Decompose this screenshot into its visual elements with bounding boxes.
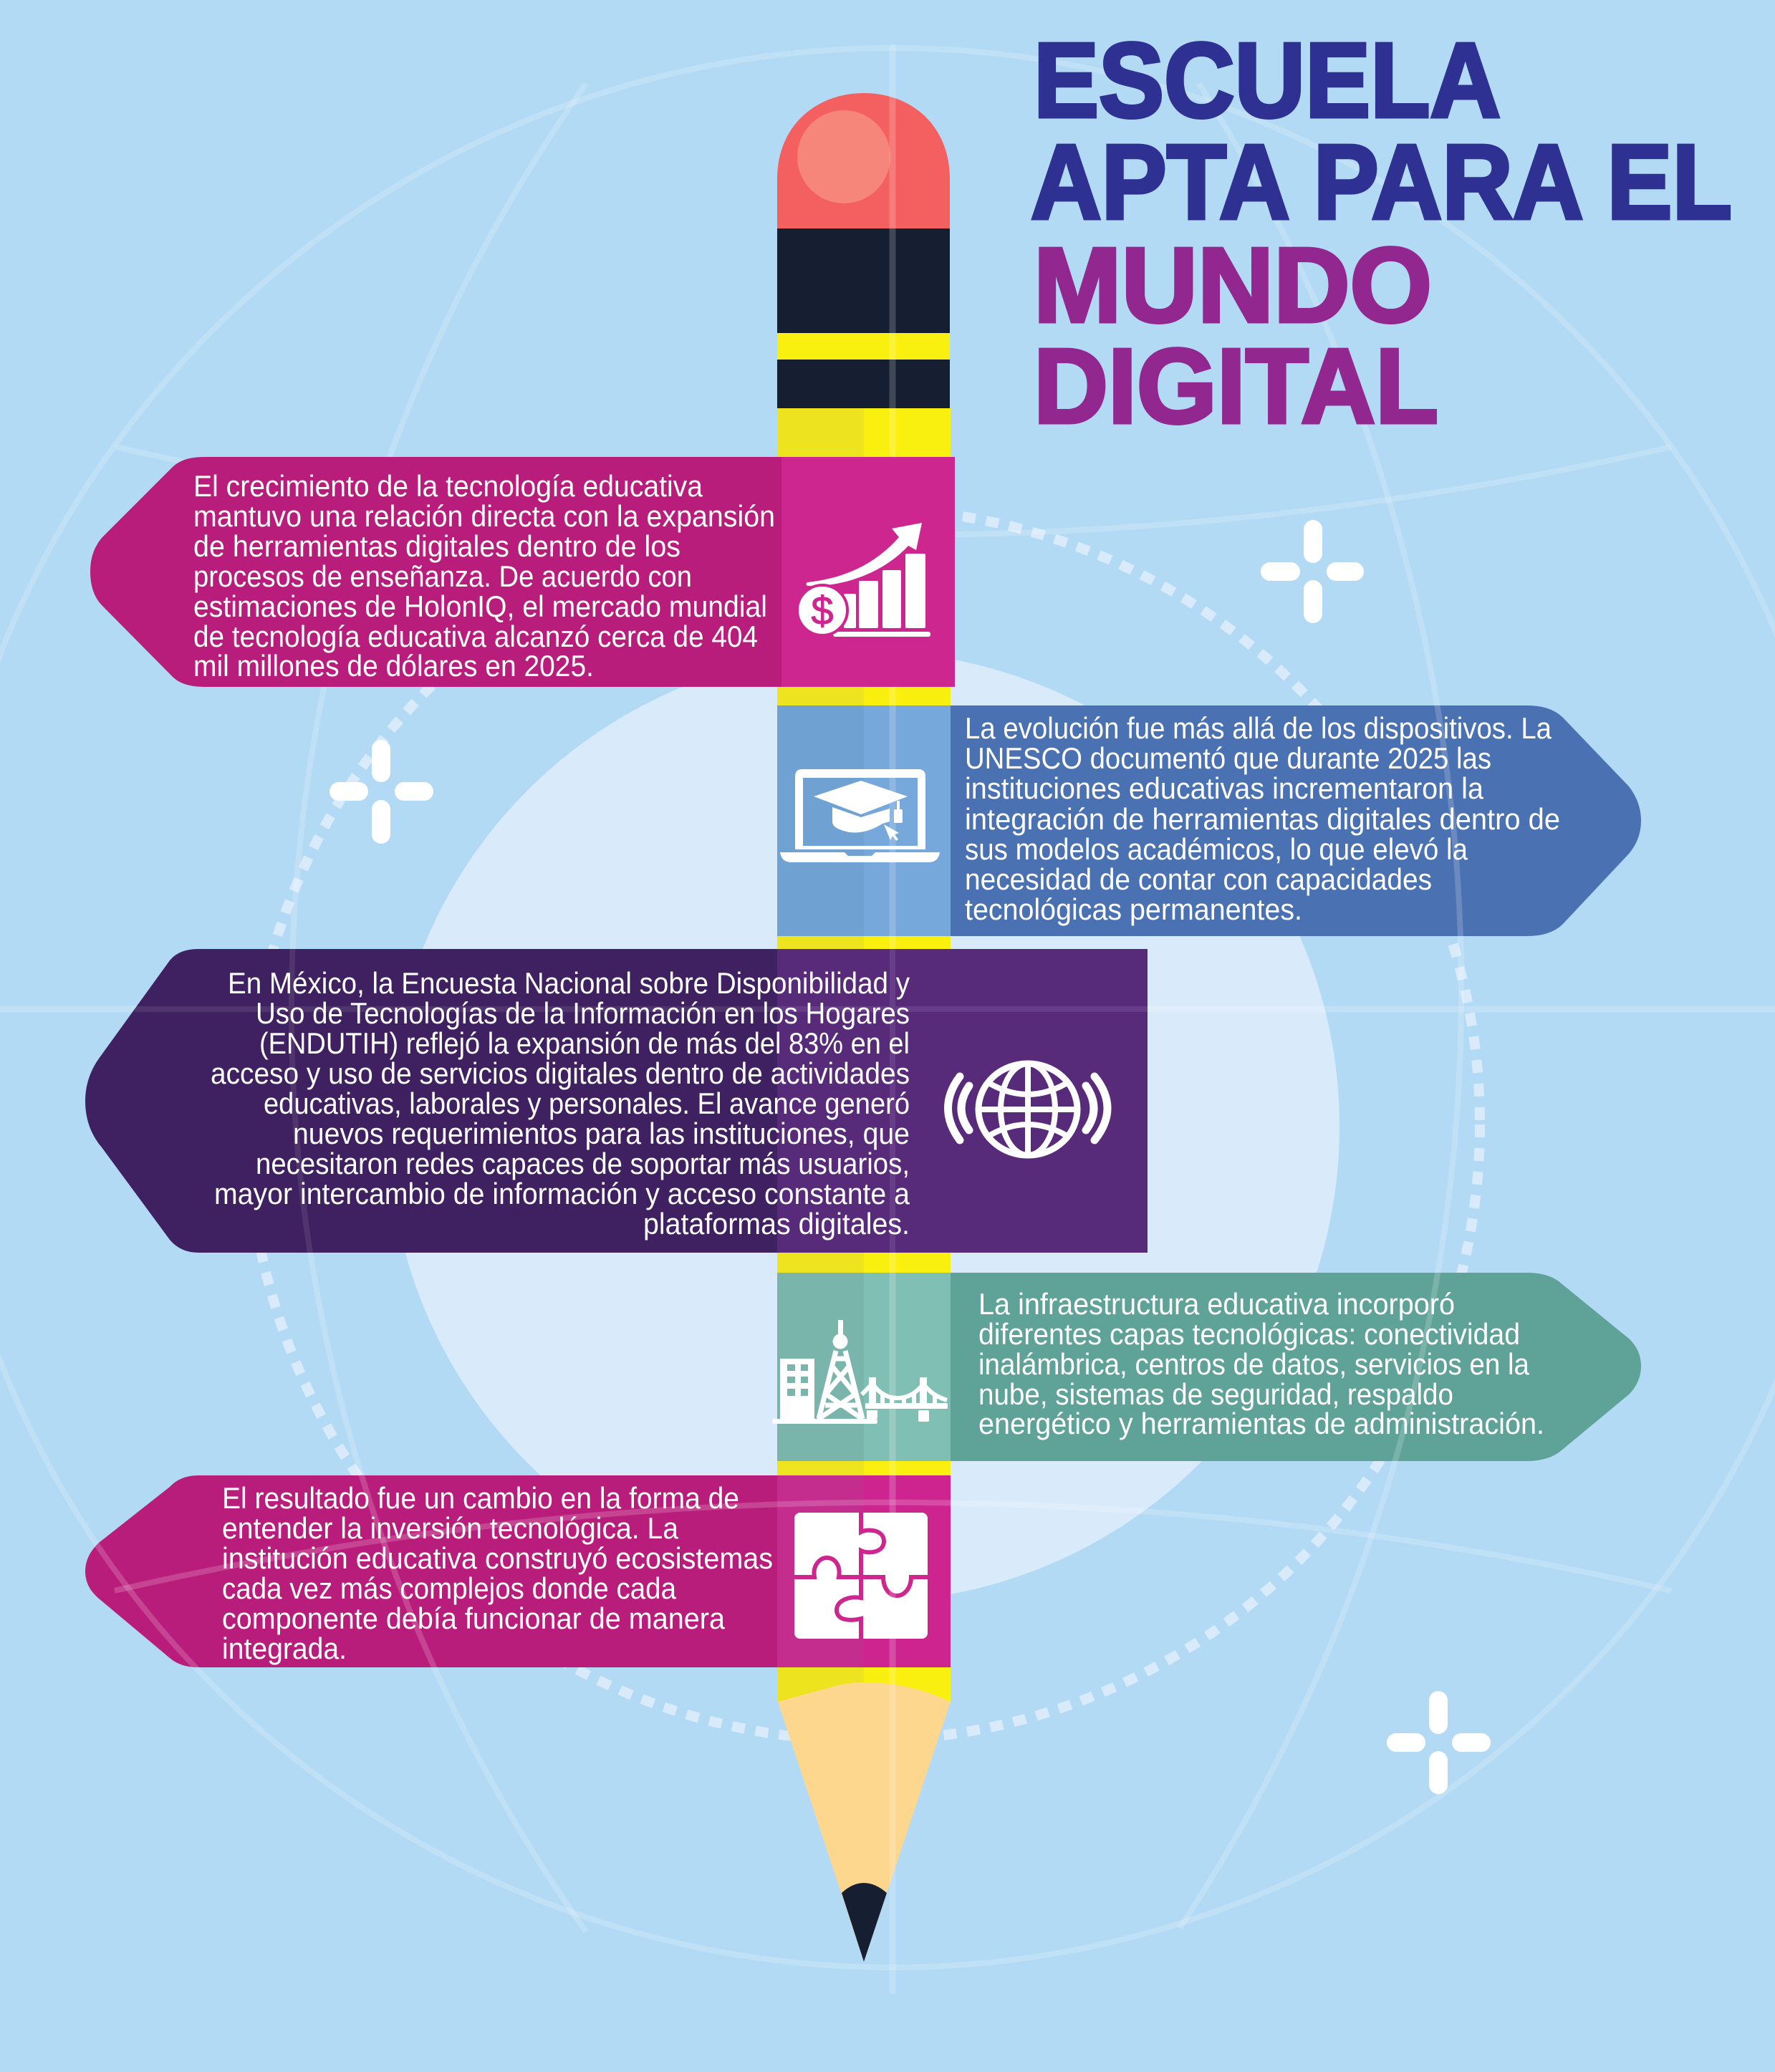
text block: sus modelos académicos, lo que elevó la (965, 832, 1468, 866)
text block: acceso y uso de servicios digitales dentro de actividades (211, 1056, 910, 1090)
sparkle bottom right (1387, 1691, 1491, 1794)
ferrule yellow band (777, 333, 950, 360)
text block: integrada. (222, 1632, 347, 1665)
coin dollar sign: $ (811, 588, 834, 633)
dotted ring (248, 509, 1480, 1740)
icon: growth chart with coin (797, 523, 930, 637)
text block: procesos de enseñanza. De acuerdo con (193, 559, 692, 593)
panel shape purple (85, 949, 1148, 1253)
text block: necesidad de contar con capacidades (965, 862, 1432, 896)
pale central circle (388, 651, 1339, 1602)
pencil wood tip (778, 1682, 951, 1962)
panel light section (777, 949, 1148, 1253)
icon: building tower and bridge (772, 1320, 948, 1424)
text block: En México, la Encuesta Nacional sobre Disponibilidad y (228, 966, 910, 1000)
text block: nube, sistemas de seguridad, respaldo (978, 1377, 1453, 1411)
text block: plataformas digitales. (643, 1207, 910, 1240)
panel shape magenta (90, 457, 781, 687)
pencil section left (777, 1273, 864, 1461)
title: APTA PARA EL (1031, 123, 1732, 241)
icon: globe with signal waves (948, 1064, 1107, 1155)
text block: El crecimiento de la tecnología educativa (193, 469, 703, 503)
panel: resultado (85, 1475, 951, 1667)
panel: mercado HolonIQ (90, 457, 955, 687)
text block: energético y herramientas de administración. (978, 1407, 1544, 1440)
eraser (777, 93, 950, 228)
text block: entender la inversión tecnológica. La (222, 1511, 679, 1545)
text block: educativas, laborales y personales. El avance generó (264, 1086, 910, 1120)
text block: mayor intercambio de información y acceso constante a (214, 1177, 910, 1210)
text block: de herramientas digitales dentro de los (193, 529, 680, 563)
text block: (ENDUTIH) reflejó la expansión de más del 83% en el (259, 1026, 910, 1060)
ferrule lower dark band (777, 360, 950, 408)
panel shape magenta (85, 1475, 951, 1667)
text block: inalámbrica, centros de datos, servicios en la (978, 1347, 1530, 1381)
text block (965, 711, 1560, 926)
title: DIGITAL (1034, 327, 1438, 445)
title (1031, 21, 1732, 445)
pencil lead (842, 1883, 887, 1962)
title: MUNDO (1034, 226, 1432, 344)
text block: diferentes capas tecnológicas: conectividad (978, 1317, 1520, 1351)
text block (978, 1287, 1544, 1440)
panel shape teal (951, 1273, 1641, 1461)
text block: necesitaron redes capaces de soportar más usuarios, (256, 1147, 910, 1180)
text block: estimaciones de HolonIQ, el mercado mundial (193, 589, 767, 623)
icon: laptop with graduation cap (780, 769, 940, 862)
pencil section left (777, 1475, 864, 1667)
text block: integración de herramientas digitales dentro de (965, 802, 1560, 836)
pencil section left (777, 705, 864, 936)
icon: puzzle (794, 1513, 928, 1639)
text block: El resultado fue un cambio en la forma de (222, 1481, 739, 1515)
text block (193, 469, 775, 683)
text block: instituciones educativas incrementaron la (965, 771, 1484, 805)
pencil section right (864, 705, 951, 936)
text block: La infraestructura educativa incorporó (978, 1287, 1455, 1321)
sparkle top right (1261, 520, 1364, 623)
text block (211, 966, 910, 1240)
text block: mil millones de dólares en 2025. (193, 649, 594, 683)
pencil (777, 93, 951, 1962)
title: ESCUELA (1034, 21, 1501, 140)
panel: México ENDUTIH (85, 949, 1148, 1253)
text block: Uso de Tecnologías de la Información en los Hogares (256, 996, 910, 1030)
text block: cada vez más complejos donde cada (222, 1571, 677, 1605)
panel: UNESCO (777, 705, 1641, 936)
text block: tecnológicas permanentes. (965, 892, 1302, 926)
text block: UNESCO documentó que durante 2025 las (965, 741, 1491, 775)
ferrule dark band (777, 228, 950, 333)
panel: infraestructura (772, 1273, 1641, 1461)
text block (222, 1481, 773, 1665)
text block: La evolución fue más allá de los dispositivos. La (965, 711, 1552, 745)
text block: componente debía funcionar de manera (222, 1601, 726, 1635)
pencil section right (864, 1475, 951, 1667)
pencil section right (864, 1273, 951, 1461)
panel light section (781, 457, 955, 687)
sparkle left (329, 740, 433, 844)
text block: mantuvo una relación directa con la expansión (193, 499, 775, 533)
panel shape blue (951, 705, 1641, 936)
text block: institución educativa construyó ecosistemas (222, 1541, 773, 1575)
pencil barrel shade (777, 408, 864, 1702)
text block: nuevos requerimientos para las instituciones, que (293, 1117, 910, 1150)
pencil yellow barrel (777, 408, 951, 1702)
text block: de tecnología educativa alcanzó cerca de 404 (193, 620, 758, 653)
eraser highlight (797, 110, 890, 203)
